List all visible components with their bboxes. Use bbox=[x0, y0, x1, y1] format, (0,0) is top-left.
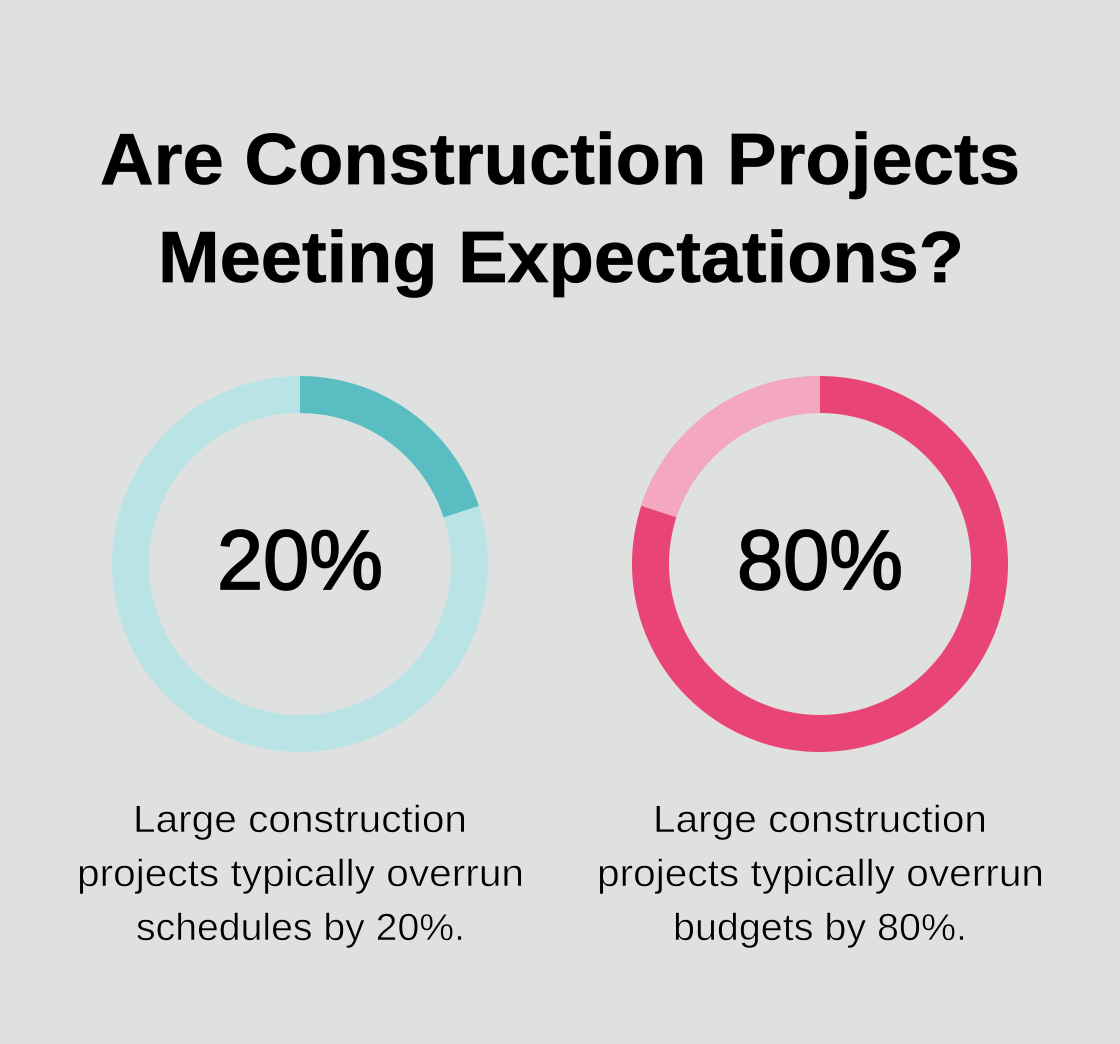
description: schedules: projects typically overrun bbox=[77, 853, 524, 895]
title bbox=[100, 120, 1020, 298]
description: schedules: Large construction bbox=[133, 799, 467, 841]
donut chart: 80% bbox=[650, 394, 990, 734]
title: Are Construction Projects bbox=[100, 120, 1020, 200]
description: budgets: Large construction bbox=[653, 799, 987, 841]
donut chart: 20% bbox=[130, 394, 470, 734]
value: 80%: 80% bbox=[737, 513, 903, 607]
description: schedules bbox=[77, 799, 524, 949]
title: Meeting Expectations? bbox=[158, 218, 964, 298]
panel: budget overrun bbox=[597, 394, 1044, 949]
description: budgets: budgets by 80%. bbox=[673, 907, 967, 949]
description: budgets: projects typically overrun bbox=[597, 853, 1044, 895]
value: 20%: 20% bbox=[217, 513, 383, 607]
panel: schedule overrun bbox=[77, 394, 524, 949]
description: budgets bbox=[597, 799, 1044, 949]
description: schedules: schedules by 20%. bbox=[136, 907, 465, 949]
